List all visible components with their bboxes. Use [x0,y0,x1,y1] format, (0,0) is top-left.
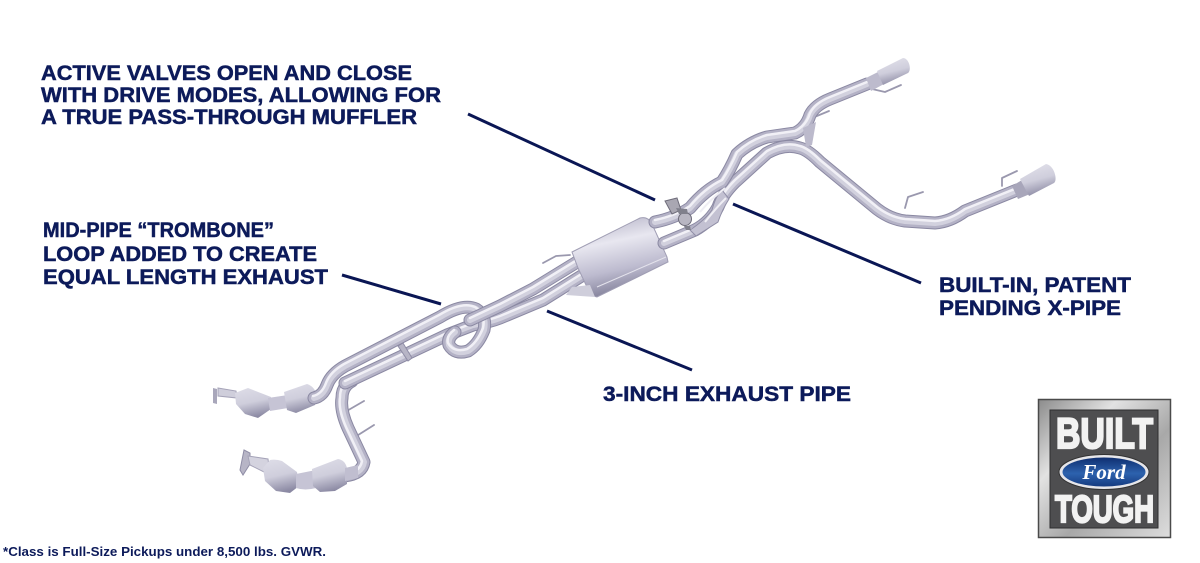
callout: active valves: ACTIVE VALVES OPEN AND CLOSE [41,62,412,85]
logo: Built Ford Tough [1038,400,1170,538]
logo: Built Ford Tough: TOUGH [1055,489,1154,531]
callout: active valves [41,62,441,129]
mid pipe second run [345,273,583,383]
callout: trombone loop: MID-PIPE “TROMBONE” [43,219,274,242]
lower catalytic converter assembly [240,380,364,493]
x-pipe crossover [690,188,729,236]
upper catalytic converter assembly [213,384,317,418]
arrow: 3-inch pipe leader [547,311,692,370]
callout: x-pipe: BUILT-IN, PATENT [939,274,1131,297]
active valves [665,198,692,230]
arrow: trombone leader [342,275,441,304]
mid-pipe trombone loop [313,260,577,398]
callout: active valves: WITH DRIVE MODES, ALLOWING FOR [41,84,441,107]
callout: 3-inch pipe: 3-INCH EXHAUST PIPE [603,383,851,406]
exhaust system diagram [213,58,1056,493]
tailpipe lower branch [664,144,1017,243]
callout: trombone loop [43,219,328,289]
lower exhaust tip [1012,164,1056,199]
logo: Built Ford Tough: Ford [1081,460,1126,484]
brackets and hangers [345,85,1017,437]
callout: x-pipe: PENDING X-PIPE [939,297,1121,320]
upper exhaust tip [877,58,910,85]
arrow: x-pipe leader [733,204,921,283]
logo: Built Ford Tough: BUILT [1056,410,1153,458]
muffler [566,218,668,297]
callout: active valves: A TRUE PASS-THROUGH MUFFLER [41,106,417,129]
callout: x-pipe [939,274,1131,320]
footnote: *Class is Full-Size Pickups under 8,500 lbs. GVWR. [3,545,326,559]
tailpipe upper branch [655,72,884,222]
arrow: active valves leader [468,114,655,200]
callout: trombone loop: LOOP ADDED TO CREATE [43,243,317,266]
callout: trombone loop: EQUAL LENGTH EXHAUST [43,266,328,289]
